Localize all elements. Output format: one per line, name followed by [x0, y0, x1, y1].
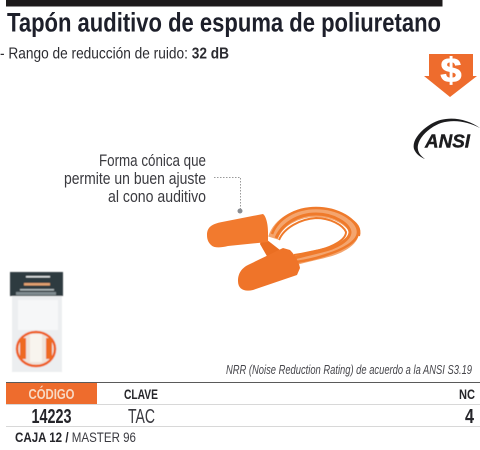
product: retail package: [10, 272, 63, 372]
table value: NC: 4: [465, 406, 475, 428]
earplug lower: [238, 248, 300, 291]
table header: código: CÓDIGO: [28, 385, 74, 403]
cord loop: [272, 208, 359, 262]
product: orange earplugs with cord: [207, 208, 359, 291]
icon: ANSI logo: ANSI: [424, 132, 471, 152]
callout: conical shape: Forma cónica que: [99, 152, 206, 170]
callout: conical shape: permite un buen ajuste: [64, 170, 206, 188]
spec line: noise reduction: - Rango de reducción de ruido: 32 dB: [0, 46, 229, 62]
earplug upper: [207, 214, 268, 247]
table value: key: TAC: [128, 406, 155, 428]
product table: [6, 382, 480, 428]
earplug neck: [260, 236, 280, 258]
table header: NC: NC: [459, 386, 475, 402]
icon: price down arrow: $: [440, 52, 462, 90]
packing info: CAJA 12 / MASTER 96: [15, 429, 136, 445]
icon: price down arrow: [424, 52, 477, 97]
table header: clave: CLAVE: [124, 386, 158, 402]
icon: ANSI logo: [414, 119, 480, 159]
top black bar: [6, 0, 442, 6]
table header: código: [6, 383, 97, 404]
callout: conical shape: al cono auditivo: [108, 188, 206, 206]
table value: code: 14223: [32, 406, 72, 428]
callout: conical shape: [64, 152, 242, 214]
